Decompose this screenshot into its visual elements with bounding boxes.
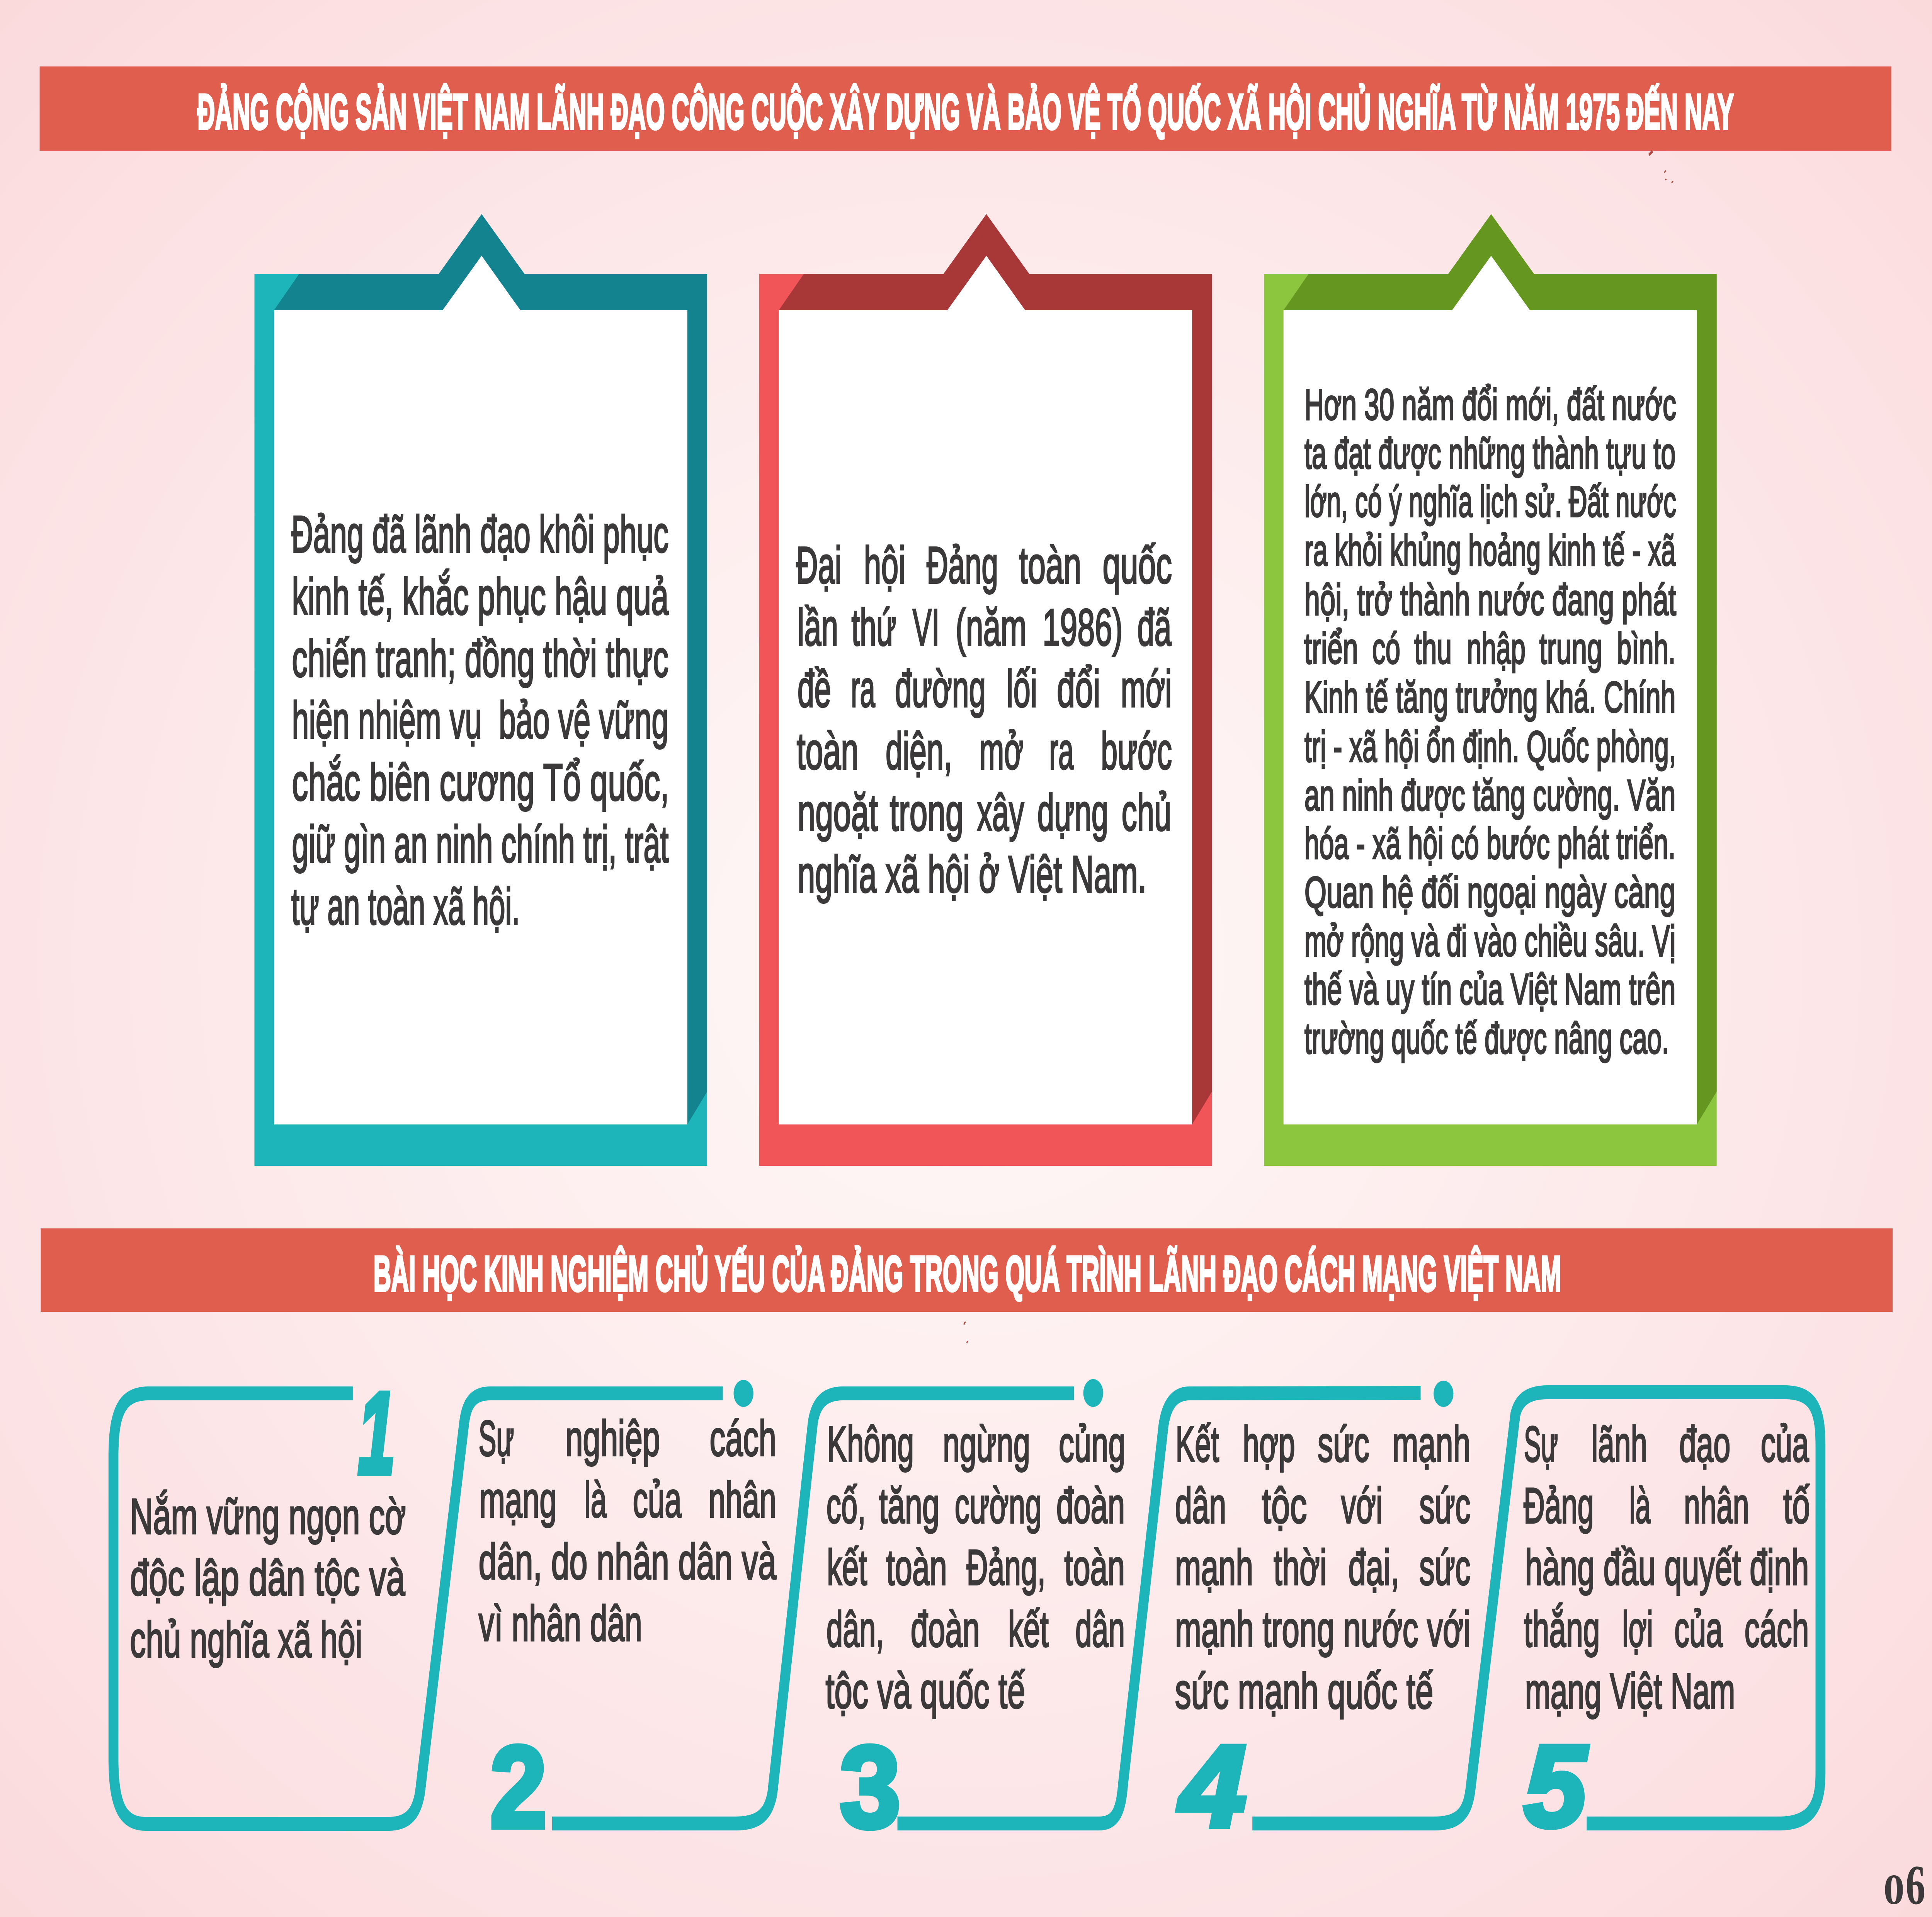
card 3 text: trị - xã hội ổn định. Quốc phòng, bbox=[1304, 722, 1676, 771]
card 1 text: hiện nhiệm vụ bảo vệ vững bbox=[292, 691, 668, 749]
lesson 5 text: nhân bbox=[1684, 1478, 1749, 1534]
lesson 3 text: cố, bbox=[827, 1478, 866, 1534]
card 2 text: (năm bbox=[956, 598, 1027, 657]
lesson 4 text: Kết bbox=[1175, 1416, 1219, 1472]
panel: lesson 5 bbox=[1493, 1392, 1820, 1851]
lesson 2 text: vì nhân dân bbox=[479, 1596, 642, 1652]
card 1 text: kinh tế, khắc phục hậu quả bbox=[292, 567, 669, 626]
lesson 3 text: dân, bbox=[827, 1601, 884, 1657]
card 3 text: hội, trở thành nước đang phát bbox=[1304, 575, 1676, 624]
lesson 4 text: với bbox=[1341, 1478, 1383, 1534]
lesson 4 text: sức bbox=[1419, 1539, 1471, 1596]
number 3: 3 bbox=[840, 1722, 900, 1852]
lesson 4 text: hợp bbox=[1243, 1416, 1295, 1472]
lesson 3 text: đoàn bbox=[1056, 1478, 1125, 1534]
card 3 text: triển bbox=[1304, 624, 1358, 673]
lesson 5 text: cách bbox=[1745, 1601, 1809, 1657]
dot bbox=[1083, 1379, 1103, 1407]
lesson 3 text: kết bbox=[827, 1539, 867, 1596]
lesson 2 text: mạng bbox=[479, 1472, 557, 1528]
lesson 4 text: mạnh bbox=[1392, 1416, 1471, 1472]
card 3 text: Quan hệ đối ngoại ngày càng bbox=[1304, 868, 1676, 917]
lesson 2 text: là bbox=[584, 1472, 607, 1528]
card 1 text: giữ gìn an ninh chính trị, trật bbox=[292, 815, 668, 873]
card 2 text bbox=[796, 536, 1172, 903]
lesson 2 text: của bbox=[633, 1472, 682, 1528]
lesson 3 text: củng bbox=[1059, 1416, 1126, 1472]
lesson 3 text bbox=[826, 1416, 1126, 1719]
card 3 text: bình. bbox=[1617, 624, 1676, 673]
lesson 3 text: cường bbox=[955, 1478, 1042, 1534]
card 3 text: có bbox=[1372, 624, 1400, 673]
card 3 text: trường quốc tế được nâng cao. bbox=[1304, 1014, 1669, 1063]
lesson 5 text: Đảng bbox=[1524, 1478, 1594, 1534]
lesson 1 text: Nắm vững ngọn cờ bbox=[130, 1488, 406, 1544]
panel: card 2 red bbox=[759, 214, 1212, 1166]
card 2 text: toàn bbox=[1019, 536, 1082, 594]
lesson 5 text: của bbox=[1761, 1416, 1809, 1472]
lesson 5 text: là bbox=[1629, 1478, 1651, 1534]
lesson 5 text: Sự bbox=[1524, 1416, 1558, 1472]
lesson 4 text: mạnh trong nước với bbox=[1175, 1601, 1471, 1657]
card 2 text: đổi bbox=[1057, 660, 1100, 718]
lesson 2 text: nghiệp bbox=[565, 1410, 660, 1466]
card 2 text: đường bbox=[895, 660, 986, 718]
panel: lesson 2 bbox=[442, 1380, 793, 1852]
lesson 5 text: mạng Việt Nam bbox=[1525, 1663, 1735, 1719]
panel: lesson 4 bbox=[1143, 1381, 1493, 1851]
lesson 2 text bbox=[479, 1410, 776, 1652]
lesson 5 text: thắng bbox=[1524, 1601, 1600, 1657]
lesson 3 text: đoàn bbox=[911, 1601, 980, 1657]
lesson 2 text: Sự bbox=[479, 1410, 514, 1466]
card 2 text: dựng bbox=[1037, 783, 1108, 842]
card 1 text bbox=[291, 505, 669, 936]
card 1 text: tự an toàn xã hội. bbox=[291, 877, 520, 936]
card 2 text: lần bbox=[798, 598, 838, 657]
page number bbox=[1884, 1854, 1925, 1916]
card 2 text: ra bbox=[1049, 722, 1074, 780]
card 2 text: quốc bbox=[1102, 536, 1172, 594]
lesson 5 text: lãnh bbox=[1591, 1416, 1647, 1472]
lesson 3 text: kết bbox=[1008, 1601, 1049, 1657]
card 2 text: nghĩa xã hội ở Việt Nam. bbox=[798, 845, 1147, 903]
card 1 text: chiến tranh; đồng thời thực bbox=[292, 629, 668, 688]
card 2 text: lối bbox=[1007, 660, 1037, 718]
card 2 text: đã bbox=[1137, 598, 1172, 657]
card 3 text: lớn, có ý nghĩa lịch sử. Đất nước bbox=[1304, 477, 1676, 526]
banner: main title bbox=[40, 66, 1891, 151]
lesson 3 text: dân bbox=[1075, 1601, 1125, 1657]
panel: card 1 teal bbox=[254, 214, 707, 1166]
lesson 1 text: độc lập dân tộc và bbox=[130, 1550, 405, 1606]
card 3 text bbox=[1304, 380, 1676, 1063]
lesson 1 text: chủ nghĩa xã hội bbox=[130, 1612, 362, 1668]
card 2 text: thứ bbox=[852, 598, 896, 657]
card 2 text: trong bbox=[890, 783, 964, 842]
card 3 text: thu bbox=[1414, 624, 1452, 673]
panel: lesson 1 bbox=[114, 1368, 442, 1824]
card 2 text: 1986) bbox=[1043, 598, 1123, 657]
panel: lesson 3 bbox=[793, 1379, 1143, 1852]
lesson 3 text: toàn bbox=[886, 1539, 947, 1596]
lesson 2 text: dân, do nhân dân và bbox=[479, 1534, 776, 1590]
lesson 3 text: toàn bbox=[1064, 1539, 1125, 1596]
card 3 text: nhập bbox=[1467, 624, 1526, 673]
number 5: 5 bbox=[1524, 1721, 1588, 1851]
lesson 5 text bbox=[1524, 1416, 1810, 1719]
card 2 text: Đại bbox=[796, 536, 842, 594]
number 2: 2 bbox=[490, 1722, 547, 1852]
card 3 text: Kinh tế tăng trưởng khá. Chính bbox=[1304, 673, 1676, 721]
card 3 text: mở rộng và đi vào chiều sâu. Vị bbox=[1304, 917, 1676, 965]
number 4: 4 bbox=[1176, 1721, 1246, 1851]
card 2 text: Đảng bbox=[927, 536, 998, 594]
lesson 4 text: sức bbox=[1419, 1478, 1471, 1534]
dot bbox=[1434, 1381, 1453, 1407]
card 2 text: mới bbox=[1121, 660, 1172, 718]
card 3 text: ta đạt được những thành tựu to bbox=[1304, 429, 1676, 478]
card 1 text: chắc biên cương Tổ quốc, bbox=[292, 753, 669, 811]
card 3 text: hóa - xã hội có bước phát triển. bbox=[1304, 819, 1676, 868]
lesson 3 text: tăng bbox=[879, 1478, 940, 1534]
card 2 text: ra bbox=[851, 660, 875, 718]
lesson 4 text: đại, bbox=[1348, 1539, 1400, 1596]
card 2 text: chủ bbox=[1122, 783, 1172, 842]
number 1: 1 bbox=[358, 1368, 395, 1498]
card 2 text: đề bbox=[798, 660, 831, 718]
lesson 5 text: tố bbox=[1783, 1478, 1810, 1534]
lesson 3 text: tộc và quốc tế bbox=[826, 1663, 1025, 1719]
card 3 text: ra khỏi khủng hoảng kinh tế - xã bbox=[1304, 526, 1676, 575]
lesson 4 text: sức mạnh quốc tế bbox=[1175, 1663, 1433, 1719]
lesson 5 text: đạo bbox=[1679, 1416, 1730, 1472]
lesson 3 text: Đảng, bbox=[966, 1539, 1046, 1596]
lesson 2 text: cách bbox=[710, 1410, 776, 1466]
page number: 6 bbox=[1906, 1854, 1925, 1916]
page number: 0 bbox=[1884, 1866, 1905, 1913]
card 2 text: VI bbox=[913, 598, 940, 657]
card 1 text: Đảng đã lãnh đạo khôi phục bbox=[291, 505, 668, 563]
lesson 5 text: của bbox=[1674, 1601, 1723, 1657]
lesson 4 text: mạnh bbox=[1175, 1539, 1253, 1596]
banner: lessons heading bbox=[41, 1228, 1893, 1312]
panel: card 3 green bbox=[1264, 214, 1717, 1166]
lesson 2 text: nhân bbox=[709, 1472, 776, 1528]
card 2 text: ngoặt bbox=[798, 783, 878, 842]
lesson 4 text bbox=[1175, 1416, 1471, 1719]
card 2 text: toàn bbox=[797, 722, 859, 780]
lesson 4 text: tộc bbox=[1262, 1478, 1307, 1534]
lesson 3 text: Không bbox=[827, 1416, 914, 1472]
card 2 text: bước bbox=[1101, 722, 1172, 780]
lesson 4 text: sức bbox=[1318, 1416, 1369, 1472]
lesson 4 text: thời bbox=[1274, 1539, 1327, 1596]
card 3 text: thế và uy tín của Việt Nam trên bbox=[1304, 965, 1676, 1014]
card 2 text: hội bbox=[864, 536, 905, 594]
dot bbox=[734, 1380, 753, 1407]
lesson 1 text bbox=[130, 1488, 406, 1668]
card 3 text: an ninh được tăng cường. Văn bbox=[1304, 771, 1676, 820]
card 2 text: mở bbox=[979, 722, 1024, 780]
card 2 text: diện, bbox=[886, 722, 952, 780]
lesson 5 text: lợi bbox=[1622, 1601, 1653, 1657]
card 3 text: trung bbox=[1539, 624, 1602, 673]
card 2 text: xây bbox=[977, 783, 1024, 842]
card 3 text: Hơn 30 năm đổi mới, đất nước bbox=[1304, 380, 1676, 429]
lesson 5 text: hàng đầu quyết định bbox=[1525, 1539, 1809, 1596]
lesson 3 text: ngừng bbox=[943, 1416, 1030, 1472]
lesson 4 text: dân bbox=[1175, 1478, 1226, 1534]
